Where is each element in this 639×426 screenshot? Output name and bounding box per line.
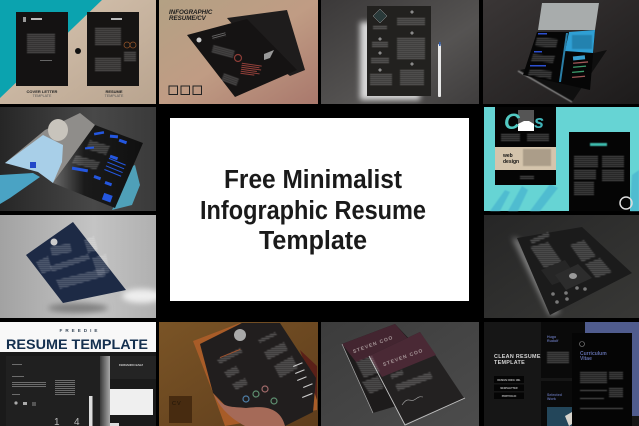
portrait diamond [373, 9, 387, 23]
panel: navy resume on grey [0, 215, 162, 318]
text lines [217, 332, 298, 390]
cv label: CV [172, 401, 182, 407]
blue info box [565, 30, 595, 53]
front page [369, 332, 464, 424]
pen [438, 44, 441, 97]
main page [6, 356, 100, 426]
icon row [551, 286, 587, 304]
logo [569, 273, 577, 279]
panel: clean resume template [484, 322, 639, 426]
label: resume: RESUME [105, 89, 123, 94]
section diamonds [378, 10, 414, 72]
back page [227, 10, 305, 76]
orange backing sheet [193, 323, 317, 426]
cover letter page [16, 12, 68, 86]
white banner [0, 322, 156, 352]
signature [402, 397, 423, 405]
page [367, 6, 431, 96]
left hand [0, 173, 40, 204]
heading: INFOGRAPHIC [169, 9, 213, 16]
portrait [50, 238, 58, 246]
pen [89, 396, 92, 426]
panel: dark resume flat lay [484, 215, 639, 318]
panel: teal cv [484, 107, 639, 211]
panel: open brochure with hands [0, 107, 156, 211]
back page one subtitle: Rudolf [547, 339, 559, 343]
cv swatch [169, 396, 192, 423]
blue headings [530, 33, 547, 66]
panel: blue brochure [483, 0, 639, 104]
panel: dark resume and pen [321, 0, 479, 104]
back page one title: Hugo [547, 335, 557, 339]
glow [360, 22, 420, 100]
photo on left page [5, 135, 63, 183]
beige band chart [523, 149, 551, 166]
work photo [547, 407, 575, 426]
front page [187, 19, 297, 97]
heading line two: RESUME/CV [169, 15, 207, 22]
head [48, 119, 68, 141]
heading: CLEAN RESUME [494, 354, 541, 360]
title line two: Infographic Resume [200, 197, 426, 225]
button: newsletter: NEWSLETTER [500, 387, 518, 390]
freebie text: FREEDIE [60, 328, 100, 333]
small white card [110, 423, 119, 426]
body text [501, 134, 549, 142]
brochure top photo [538, 3, 599, 30]
letter text [356, 356, 433, 394]
resume page [87, 12, 139, 86]
panel: freebie resume template [0, 322, 156, 426]
app icons [169, 86, 202, 94]
side glow [100, 356, 110, 426]
text lines [528, 37, 558, 79]
front page text [580, 371, 623, 409]
second page text [574, 155, 624, 195]
blue marks [72, 131, 127, 202]
back page [342, 324, 456, 413]
front page name: STEVEN COO [382, 348, 424, 368]
banner title: RESUME TEMPLATE [6, 336, 148, 352]
button: portfolio [494, 392, 524, 399]
panel: white title card [170, 118, 469, 301]
dark page [200, 323, 316, 426]
button: newsletter [494, 384, 524, 391]
page glow [512, 237, 560, 316]
script title end: s [534, 112, 544, 132]
label: cover letter template: TEMPLATE [33, 94, 52, 98]
page text [530, 232, 612, 278]
label: cover letter: COVER LETTER [27, 89, 58, 94]
under page [520, 50, 607, 102]
back page one [541, 322, 585, 378]
purple sheet [585, 322, 639, 416]
logo card [555, 264, 592, 290]
blue square [30, 162, 36, 168]
teal corner [0, 0, 102, 98]
light streak [122, 289, 162, 303]
shadow [48, 303, 108, 313]
avatar [234, 329, 246, 341]
icon row [14, 401, 36, 406]
portrait shirt [518, 121, 534, 131]
page curl [213, 393, 285, 426]
right page [53, 125, 143, 208]
script title: C [504, 109, 521, 134]
page [517, 227, 632, 315]
back page name: STEVEN COO [352, 335, 394, 355]
brush strokes [490, 170, 639, 211]
second page [569, 132, 630, 211]
back page two title: Selected [547, 393, 562, 397]
label: resume template: TEMPLATE [105, 94, 124, 98]
card name: FERNANDO BAEZ [119, 363, 143, 367]
icon: plus circle [75, 48, 81, 54]
back page band [342, 324, 410, 362]
vitae title: Vitae [580, 356, 592, 362]
back page two subtitle: Work [547, 397, 556, 401]
business card dark [110, 356, 156, 379]
chart marks [196, 32, 274, 86]
front page edge [369, 356, 465, 425]
photo card [565, 412, 575, 426]
business cards [541, 260, 576, 285]
teal title [590, 143, 607, 146]
heading line two: TEMPLATE [494, 360, 525, 366]
front page band [369, 332, 436, 377]
portrait [518, 110, 534, 131]
right hand [112, 165, 140, 210]
design label: design [503, 159, 519, 165]
title line one: Free Minimalist [224, 166, 402, 194]
title line three: Template [259, 227, 367, 255]
button: resume: DESIGN ONCE 1ML [497, 379, 521, 382]
back page two [541, 381, 585, 426]
headphones icon [620, 197, 632, 209]
panel: orange cv with page curl [159, 322, 318, 426]
footer text [520, 176, 534, 180]
first page [495, 107, 556, 185]
back page edge [342, 344, 373, 413]
circle icons [243, 386, 277, 404]
blue divider [559, 33, 568, 82]
page [26, 222, 126, 303]
beige band [495, 147, 556, 170]
left page [5, 113, 95, 183]
colour bars [572, 55, 588, 78]
front page [572, 333, 632, 426]
button: resume [494, 376, 524, 383]
web design label: web [502, 153, 513, 159]
panel: cover letter and resume [0, 0, 156, 104]
text lines [72, 140, 110, 170]
front page logo [580, 342, 584, 346]
page text blocks [370, 17, 425, 86]
button: portfolio: PORTFOLIO [502, 395, 516, 398]
pen tip [439, 42, 441, 46]
panel: infographic resume/cv [159, 0, 318, 104]
page text [12, 364, 75, 395]
business card white [110, 389, 153, 415]
brochure dark body [523, 32, 595, 90]
dark red edge [300, 350, 317, 400]
orange heading [220, 349, 241, 358]
back page one text [547, 351, 569, 364]
page text [36, 236, 110, 289]
blue box text [572, 35, 592, 49]
page edge highlight [518, 71, 572, 102]
rating dots [293, 362, 313, 398]
panel: steven coo letterhead [321, 322, 479, 426]
curriculum title: Curriculum [580, 351, 607, 357]
